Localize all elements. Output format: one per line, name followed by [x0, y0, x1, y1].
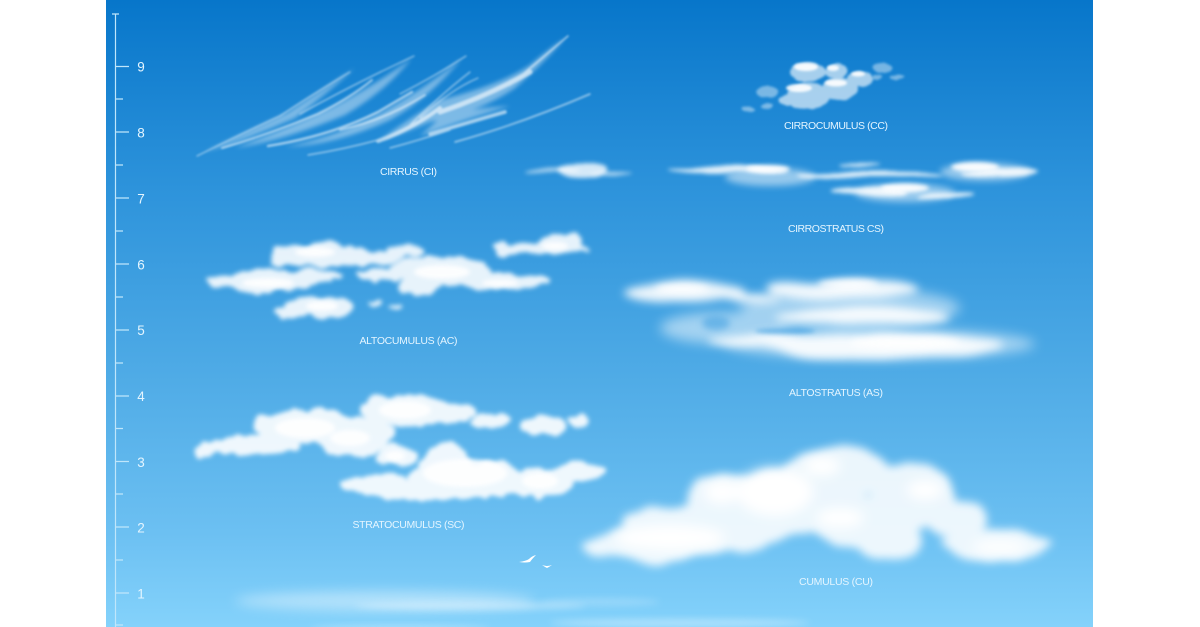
- cloud: altostratus: [623, 278, 1035, 359]
- altitude scale: [112, 14, 145, 627]
- cloud: cumulus: [582, 446, 1050, 562]
- altitude scale: 8: [137, 126, 145, 140]
- label: altocumulus: ALTOCUMULUS (AC): [360, 335, 458, 347]
- altitude scale: 2: [137, 520, 145, 536]
- altitude scale: 7: [137, 192, 145, 206]
- cloud: altocumulus: [207, 234, 592, 318]
- altitude scale: 3: [137, 455, 145, 470]
- label: altostratus: ALTOSTRATUS (AS): [789, 387, 883, 399]
- cloud: cirrostratus: [670, 162, 1040, 202]
- label: cirrocumulus: CIRROCUMULUS (CC): [784, 120, 888, 132]
- label: cirrus: CIRRUS (CI): [380, 166, 437, 178]
- cloud: stratocumulus: [194, 394, 604, 500]
- icon: birds: [519, 555, 552, 568]
- label: stratocumulus: STRATOCUMULUS (SC): [352, 519, 464, 531]
- altitude scale: 1: [137, 586, 145, 602]
- altitude scale: 4: [137, 389, 145, 404]
- cloud: stratus: [235, 591, 810, 627]
- cloud: cirrus: [197, 36, 590, 156]
- altitude scale: 6: [137, 258, 145, 272]
- label: cumulus: CUMULUS (CU): [799, 576, 873, 588]
- cloud: cirrocumulus: [741, 62, 904, 112]
- cloud: small wisp: [524, 164, 634, 178]
- label: cirrostratus: CIRROSTRATUS CS): [788, 223, 884, 235]
- altitude scale: 5: [137, 323, 145, 338]
- altitude scale: 9: [137, 60, 145, 74]
